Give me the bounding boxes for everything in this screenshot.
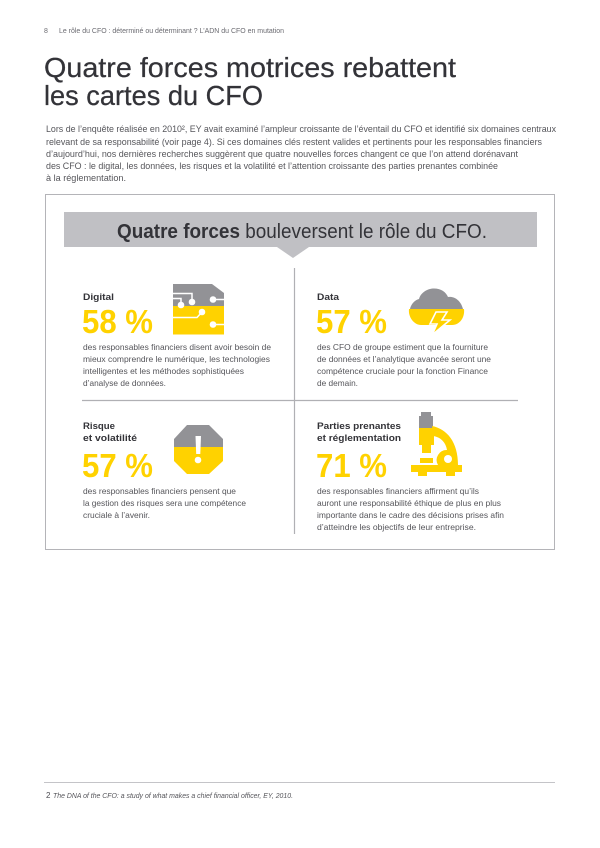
force: risk and volatility: cruciale à l’avenir.	[83, 510, 150, 520]
force: data: compétence cruciale pour la fonction Finance	[317, 366, 488, 376]
intro text: relevant de sa responsabilité (voir page 4). Si ces domaines clés restent valides et pertinents pour les responsables financiers	[46, 137, 542, 147]
force: stakeholders and regulation: importante dans le cadre des décisions prises afin	[317, 510, 504, 520]
force: risk and volatility	[82, 420, 246, 520]
force: data: de données et l’analytique avancée seront une	[317, 354, 491, 364]
force: digital: 58 %	[82, 303, 153, 340]
force: stakeholders and regulation: auront une responsabilité éthique de plus en plus	[317, 498, 501, 508]
force: stakeholders and regulation: 71 %	[316, 447, 387, 484]
force: risk and volatility: et volatilité	[83, 432, 137, 443]
force: data: des CFO de groupe estiment que la fourniture	[317, 342, 488, 352]
force: digital: d’analyse de données.	[83, 378, 166, 388]
force: digital: intelligentes et les méthodes sophistiquées	[83, 366, 244, 376]
intro text	[46, 124, 556, 183]
footnote: The DNA of the CFO: a study of what makes a chief financial officer, EY, 2010.	[53, 791, 293, 800]
force: stakeholders and regulation: et réglementation	[317, 432, 401, 443]
force: data: de demain.	[317, 378, 358, 388]
icon: warning octagon	[174, 425, 223, 474]
page header: 8	[44, 28, 48, 35]
force: risk and volatility: Risque	[83, 420, 115, 431]
banner heading: Quatre forces bouleversent le rôle du CFO.	[117, 221, 487, 243]
force: digital: mieux comprendre le numérique, les technologies	[83, 354, 270, 364]
page header: Le rôle du CFO : déterminé ou déterminant ? L’ADN du CFO en mutation	[59, 28, 284, 35]
force: risk and volatility: 57 %	[82, 447, 153, 484]
force: digital: des responsables financiers disent avoir besoin de	[83, 342, 271, 352]
icon: storm cloud	[409, 288, 464, 335]
icon: circuit board	[173, 284, 224, 334]
force: stakeholders and regulation	[316, 412, 504, 532]
force: data	[316, 288, 491, 388]
force: stakeholders and regulation: d’atteindre les objectifs de leur entreprise.	[317, 522, 476, 532]
title: Quatre forces motrices rebattent	[44, 52, 456, 83]
intro text: Lors de l’enquête réalisée en 2010², EY avait examiné l’ampleur croissante de l’éventail du CFO et identifié six domaines centraux	[46, 124, 556, 134]
force: data: Data	[317, 291, 340, 302]
force: data: 57 %	[316, 303, 387, 340]
panel: four forces	[46, 194, 554, 550]
title: les cartes du CFO	[44, 80, 263, 111]
intro text: d’aujourd’hui, nos dernières recherches suggèrent que quatre nouvelles forces changent ce que l’on attend dorénavant	[46, 149, 518, 159]
intro text: des CFO : le digital, les données, les risques et la volatilité et l’attention croissante des parties prenantes combinée	[46, 161, 498, 171]
icon: microscope	[411, 412, 462, 476]
force: risk and volatility: des responsables financiers pensent que	[83, 486, 236, 496]
force: risk and volatility: la gestion des risques sera une compétence	[83, 498, 246, 508]
banner heading	[64, 212, 537, 258]
force: stakeholders and regulation: des responsables financiers affirment qu’ils	[317, 486, 479, 496]
force: digital: Digital	[83, 291, 114, 302]
force: digital	[82, 284, 271, 388]
intro text: à la réglementation.	[46, 173, 126, 183]
force: stakeholders and regulation: Parties prenantes	[317, 420, 401, 431]
footnote: 2	[46, 791, 51, 800]
title	[44, 52, 456, 111]
